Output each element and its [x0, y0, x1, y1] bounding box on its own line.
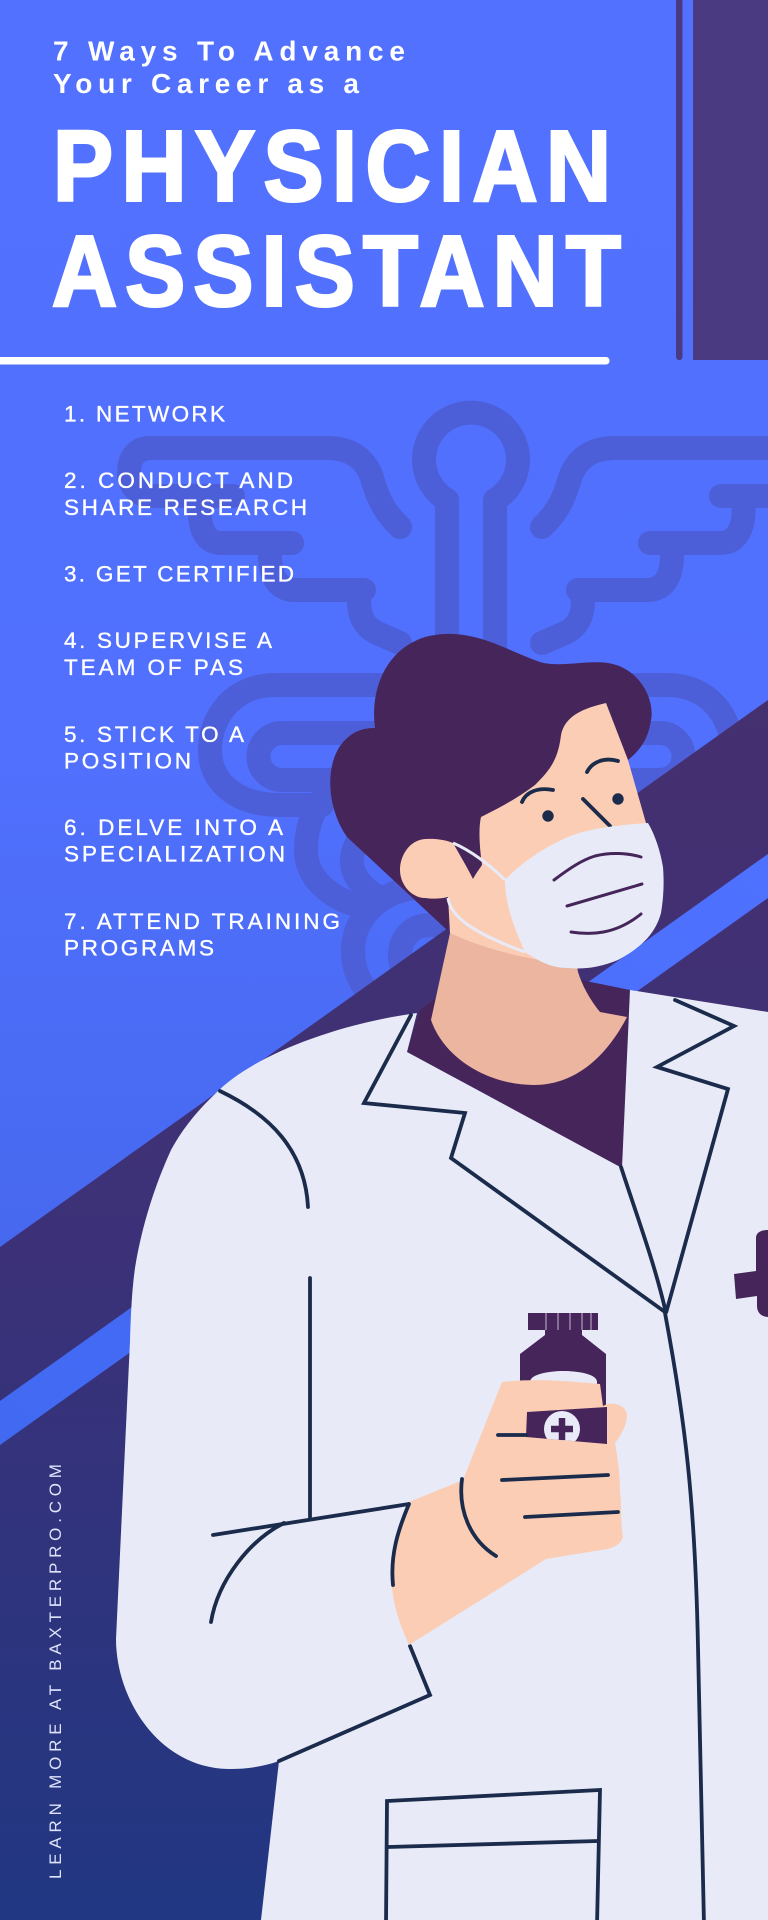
lab coat — [116, 990, 768, 1920]
item 2: 2. CONDUCT AND — [64, 468, 293, 493]
subtitle: Your Career as a — [53, 68, 359, 99]
coat outlines — [211, 1000, 734, 1920]
title block — [52, 36, 621, 328]
item 2 — [64, 468, 307, 520]
diagonal purple band — [0, 700, 768, 1920]
item 2: SHARE RESEARCH — [64, 495, 307, 520]
item 1: 1. NETWORK — [64, 402, 225, 426]
top right thin bar — [676, 0, 682, 360]
hair gap behind ear — [458, 850, 482, 879]
white divider line — [0, 357, 610, 364]
item 4: TEAM OF PAS — [64, 655, 243, 680]
item 4: 4. SUPERVISE A — [64, 628, 272, 653]
main heading: PHYSICIAN — [53, 111, 611, 223]
top right purple block — [693, 0, 768, 360]
neck — [431, 933, 627, 1085]
subtitle: 7 Ways To Advance — [53, 36, 405, 66]
diagonal blue stripe — [0, 854, 768, 1445]
face and ear — [400, 703, 646, 960]
main heading — [52, 111, 621, 328]
item 6: SPECIALIZATION — [64, 842, 285, 866]
hand and cuff outlines — [392, 1435, 618, 1585]
background caduceus symbol — [129, 413, 768, 1000]
coat pocket — [386, 1790, 600, 1920]
vertical website text: LEARN MORE AT BAXTERPRO.COM — [46, 1464, 65, 1879]
bottle label — [526, 1407, 607, 1444]
shirt — [407, 980, 630, 1168]
item 7: PROGRAMS — [64, 936, 214, 960]
item 5: 5. STICK TO A — [64, 722, 244, 747]
item 7 — [64, 909, 340, 960]
item 6 — [64, 815, 285, 866]
face mask — [448, 823, 664, 968]
item 5: POSITION — [64, 748, 191, 774]
hand — [392, 1380, 627, 1645]
main heading: ASSISTANT — [52, 216, 621, 328]
item 6: 6. DELVE INTO A — [64, 815, 283, 840]
item 3: 3. GET CERTIFIED — [64, 562, 294, 586]
doctor illustration — [116, 634, 768, 1920]
subtitle — [53, 36, 405, 99]
medicine bottle — [520, 1313, 606, 1406]
eyes and brows — [522, 760, 624, 826]
item 4 — [64, 628, 272, 680]
list of seven ways — [64, 402, 340, 960]
item 5 — [64, 722, 244, 774]
hair — [330, 634, 652, 930]
item 7: 7. ATTEND TRAINING — [64, 909, 340, 934]
coat badge cross — [734, 1230, 768, 1317]
